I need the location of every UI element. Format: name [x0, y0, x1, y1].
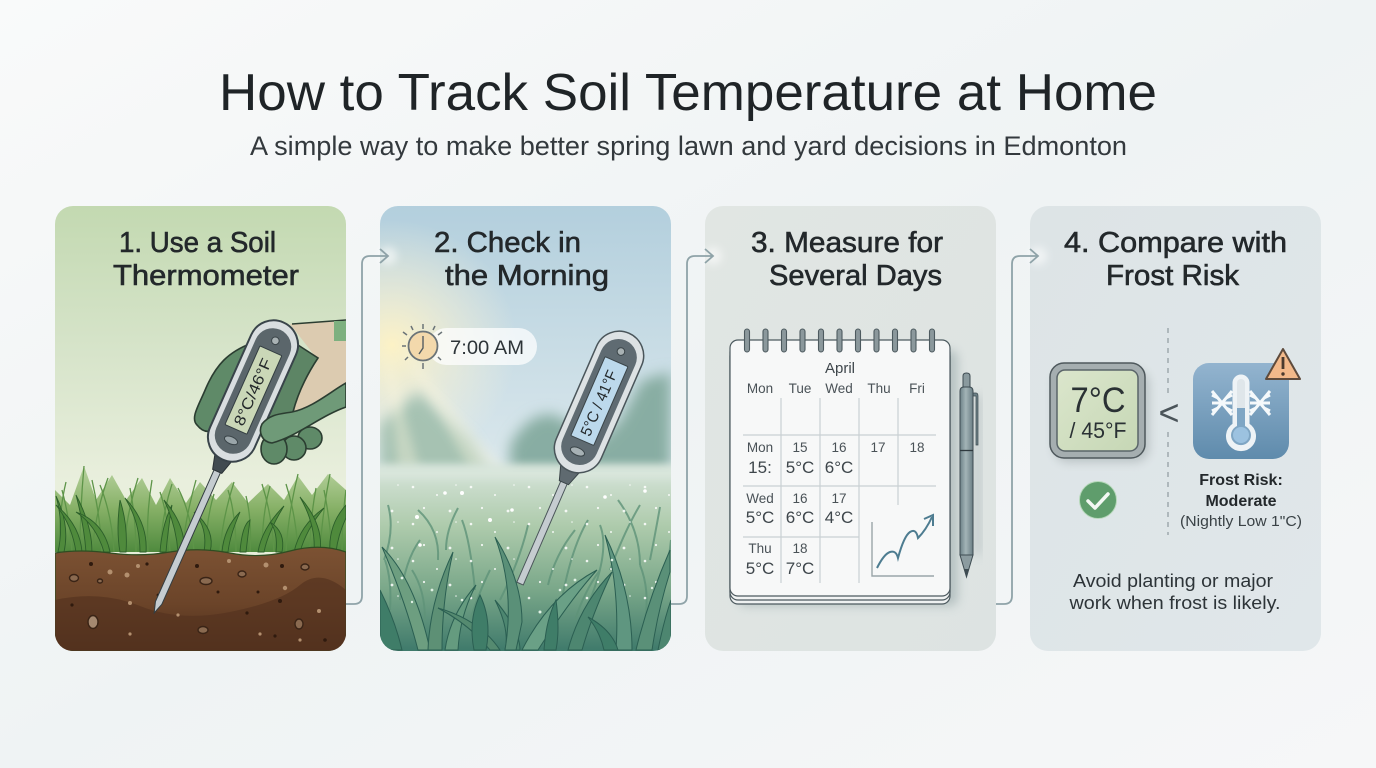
- calendar text: 17: [870, 440, 886, 455]
- heading: step 3: [751, 227, 943, 292]
- mini line chart: [872, 515, 934, 576]
- dew drops: [380, 484, 671, 604]
- glove: [194, 320, 346, 431]
- panel: step 3 measure for several days: [705, 206, 996, 651]
- thermometer reading: 8°C/46°F: [231, 356, 276, 429]
- frost risk label: [1180, 472, 1302, 530]
- frost risk label: (Nightly Low 1"C): [1180, 514, 1302, 530]
- advice text: [1068, 571, 1280, 613]
- subtitle: A simple way to make better spring lawn and yard decisions in Edmonton: [250, 131, 1127, 161]
- heading: step 2: 2. Check in: [434, 227, 581, 259]
- calendar text: Thu: [867, 381, 891, 396]
- heading: step 1: 1. Use a Soil: [119, 227, 276, 259]
- notebook calendar: [730, 329, 958, 606]
- soil reading display: / 45°F: [1070, 418, 1126, 443]
- icon: sun clock: [402, 324, 442, 369]
- calendar text: 6°C: [786, 508, 814, 527]
- grass blades front layer: [56, 495, 346, 552]
- panel: step 1 use a soil thermometer: [55, 206, 346, 651]
- heading: step 4: [1064, 227, 1287, 292]
- calendar text: Wed: [746, 491, 774, 506]
- mid grass: [384, 500, 671, 620]
- icon: check mark: [1080, 482, 1116, 518]
- calendar text: 15: [792, 440, 808, 455]
- heading: step 2: [434, 227, 609, 292]
- heading: step 1: Thermometer: [113, 260, 299, 292]
- dew on blades: [401, 559, 653, 614]
- front grass blades: [380, 535, 671, 650]
- calendar text: Tue: [789, 381, 811, 396]
- arrow: step 2 to step 3: [671, 247, 722, 604]
- thermometer reading: 5°C / 41°F: [578, 368, 621, 439]
- frost risk label: Moderate: [1205, 493, 1277, 510]
- snowflakes: [1212, 391, 1270, 415]
- calendar text: 18: [909, 440, 925, 455]
- calendar text: 18: [792, 541, 808, 556]
- time pill: 7:00 AM: [450, 338, 524, 359]
- calendar text: 5°C: [746, 508, 774, 527]
- frost risk label: Frost Risk:: [1199, 472, 1283, 489]
- soil darker layer: [55, 578, 346, 651]
- calendar text: 15:: [748, 458, 772, 477]
- arrow: step 1 to step 2: [346, 247, 397, 604]
- time pill: [428, 328, 537, 365]
- calendar text: 17: [831, 491, 847, 506]
- horizon haze: [380, 459, 671, 472]
- heading: step 4: 4. Compare with: [1064, 227, 1287, 259]
- calendar text: Mon: [747, 381, 773, 396]
- calendar text: 5°C: [786, 458, 814, 477]
- arrow: step 3 to step 4: [996, 247, 1047, 604]
- calendar text: 7°C: [786, 559, 814, 578]
- calendar text: Wed: [825, 381, 853, 396]
- divider dashed: [1167, 328, 1169, 535]
- advice text: Avoid planting or major: [1073, 571, 1273, 591]
- panel: step 4 compare with frost risk: [1030, 206, 1321, 651]
- front blade over probe: [495, 537, 522, 650]
- icon: warning triangle: [1266, 349, 1300, 379]
- spiral rings: [744, 329, 934, 352]
- calendar text: April: [825, 360, 855, 377]
- distant trees: [380, 372, 671, 475]
- sun glow: [380, 235, 497, 426]
- icon: frost thermometer: [1193, 363, 1289, 459]
- field: [380, 472, 671, 651]
- thermometer probe and body: [132, 313, 306, 623]
- soil: [55, 547, 346, 651]
- heading: step 4: Frost Risk: [1106, 260, 1240, 292]
- infographic canvas: [55, 72, 1321, 651]
- pebbles: [70, 564, 309, 634]
- calendar text: 16: [831, 440, 847, 455]
- calendar text: 4°C: [825, 508, 853, 527]
- panel: step 2 check in the morning: [380, 206, 671, 651]
- calendar grid: [743, 398, 936, 583]
- sun rays: [390, 394, 494, 466]
- icon: pen: [960, 373, 981, 577]
- calendar text: 6°C: [825, 458, 853, 477]
- grass mass: [55, 466, 346, 552]
- soil reading display: 7°C: [1070, 381, 1126, 420]
- thermometer: [498, 323, 651, 593]
- heading: step 3: Several Days: [769, 260, 942, 292]
- grass blades thin layer: [60, 466, 346, 552]
- less-than symbol: <: [1158, 392, 1180, 433]
- heading: step 1: [113, 227, 299, 292]
- heading: step 2: the Morning: [445, 260, 609, 292]
- title: How to Track Soil Temperature at Home: [219, 64, 1157, 122]
- calendar text: Mon: [747, 440, 773, 455]
- heading: step 3: 3. Measure for: [751, 227, 943, 259]
- glove fingers in front: [260, 383, 346, 464]
- calendar text: 16: [792, 491, 808, 506]
- calendar text: Thu: [748, 541, 772, 556]
- calendar text: Fri: [909, 381, 925, 396]
- advice text: work when frost is likely.: [1068, 593, 1280, 613]
- calendar text: [746, 360, 925, 578]
- soil reading display: [1050, 363, 1149, 462]
- calendar text: 5°C: [746, 559, 774, 578]
